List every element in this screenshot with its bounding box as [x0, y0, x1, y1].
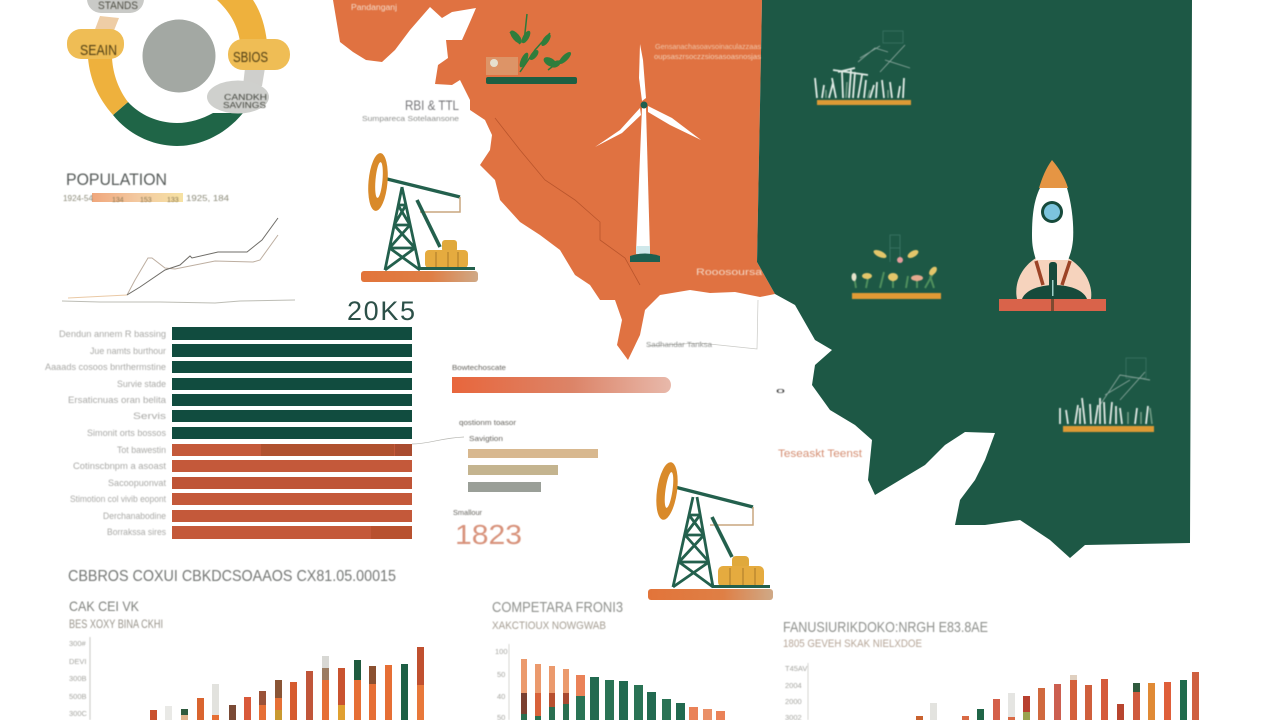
- bar labels: Borrakssa sires: [107, 527, 166, 537]
- bar labels: Jue namts burthour: [90, 346, 166, 356]
- chart: left: [69, 598, 424, 720]
- y axis: 100: [495, 647, 508, 656]
- map labels: Rooosoursa: [696, 267, 762, 277]
- map region: green territory: [757, 0, 1192, 558]
- bar labels: Survie stade: [117, 379, 166, 389]
- map labels: Pandanganj: [351, 3, 397, 12]
- y axis: 2004: [785, 681, 802, 690]
- donut label: left: [67, 29, 124, 59]
- wide red gradient bar with label: Bowtechoscate: [452, 363, 506, 372]
- bars: [521, 659, 725, 720]
- icon: oil pump left: [361, 152, 478, 282]
- map labels: oupsaszrsoczzsiosasoasnosjas: [654, 54, 762, 61]
- stat: 1823: 1823: [455, 519, 522, 550]
- donut label: top: STANDS: [98, 0, 138, 12]
- bar labels: Stimotion col vivib eopont: [70, 494, 166, 504]
- donut label: lower right: CANDKH: [224, 93, 267, 102]
- y axis: 300B: [69, 674, 87, 683]
- y axis: 300C: [69, 709, 88, 718]
- map labels: RBI & TTL: [405, 97, 459, 113]
- bar labels: Aaaads cosoos bnrthermstine: [45, 362, 166, 372]
- chart title: COMPETARA FRONI3: [492, 599, 623, 616]
- donut label: left: SEAIN: [80, 42, 117, 59]
- bar labels: Tot bawestin: [117, 445, 166, 455]
- bar labels: Servis: [133, 411, 167, 421]
- bar labels: Ersaticnuas oran belita: [68, 395, 166, 405]
- population legend: 134: [112, 197, 124, 204]
- y axis: [69, 637, 90, 720]
- chart subtitle: BES XOXY BINA CKHI: [69, 617, 163, 631]
- chart: right: [783, 619, 1199, 720]
- y axis: 500B: [69, 692, 87, 701]
- chart subtitle: 1805 GEVEH SKAK NIELXDOE: [783, 638, 922, 650]
- bar labels: Sacoopuonvat: [108, 478, 167, 488]
- horizontal bar chart: [45, 327, 412, 539]
- map labels: Sumpareca Sotelaansone: [362, 114, 459, 123]
- population line chart: [62, 218, 295, 303]
- population legend: 1924-54: [63, 194, 94, 203]
- icon: plant on orange: [486, 14, 577, 84]
- bar labels: Dendun annem R bassing: [59, 329, 166, 339]
- stat: 1823: Smallour: [453, 508, 482, 517]
- icon: oil pump lower: [648, 461, 773, 600]
- icon: grass cluster upper: [815, 31, 911, 105]
- population legend: 133: [167, 197, 179, 204]
- y axis: [495, 644, 509, 720]
- donut centre: [142, 20, 216, 92]
- small bar group: Savigtion: [469, 434, 503, 443]
- stat: 20K5: 20K5: [347, 296, 415, 326]
- population legend: 1925, 184: [186, 194, 230, 203]
- y axis: 300#: [69, 639, 87, 648]
- y axis: T45AV: [785, 664, 807, 673]
- chart title: FANUSIURIKDOKO:NRGH E83.8AE: [783, 619, 988, 636]
- chart subtitle: XAKCTIOUX NOWGWAB: [492, 620, 606, 632]
- population legend: [63, 193, 230, 204]
- bar labels: Derchanabodine: [103, 511, 166, 521]
- icon: plant cluster middle: [852, 235, 941, 299]
- donut label: right: SBIOS: [233, 49, 268, 66]
- y axis: 40: [497, 692, 505, 701]
- y axis: 50: [497, 670, 505, 679]
- bar labels: Simonit orts bossos: [87, 428, 167, 438]
- map boundary line: [648, 300, 758, 349]
- bars: green group: [172, 327, 412, 439]
- y axis: DEVI: [69, 657, 87, 666]
- map labels: [351, 3, 862, 460]
- section heading: charts: CBBROS COXUI CBKDCSOAAOS CX81.05.00015: [68, 568, 396, 585]
- map region: orange territory: [333, 0, 775, 360]
- chart: middle: [492, 599, 725, 720]
- map labels: o: [776, 388, 785, 395]
- bars: [150, 647, 424, 720]
- y axis: 2000: [785, 697, 802, 706]
- icon: wind turbine: [595, 44, 701, 262]
- population legend: 153: [140, 197, 152, 204]
- small bar group: [412, 418, 598, 492]
- bar labels: [45, 329, 167, 537]
- y axis: [785, 663, 808, 720]
- map labels: Sadhandar Tanksa: [646, 340, 713, 349]
- donut label: lower right: SAVINGS: [223, 101, 266, 110]
- icon: rocket: [999, 160, 1106, 311]
- map labels: Gensanachasoavsoinaculazzaas: [655, 44, 762, 51]
- stat: 1823: [453, 508, 522, 550]
- map labels: Teseaskt Teenst: [778, 448, 862, 460]
- bar labels: Cotinscbnpm a asoast: [73, 461, 167, 471]
- donut label: lower right: [207, 80, 269, 114]
- small bar group: qostionm toasor: [459, 418, 517, 427]
- wide red gradient bar with label: [452, 363, 671, 393]
- icon: grass cluster lower: [1060, 358, 1154, 432]
- bars: [916, 672, 1199, 720]
- population heading: POPULATION: [66, 171, 167, 189]
- bars: orange group: [172, 444, 412, 539]
- chart title: CAK CEI VK: [69, 598, 140, 614]
- donut chart: [67, 0, 290, 146]
- donut label: right: [228, 39, 290, 70]
